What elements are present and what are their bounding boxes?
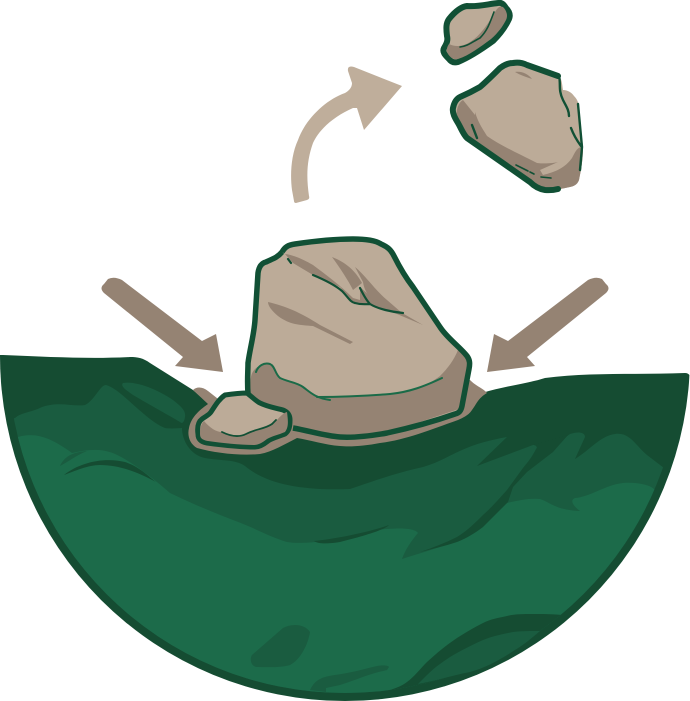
- rock outline: [248, 239, 470, 437]
- light soil layer: [18, 435, 654, 693]
- green crack along shadow edge: [256, 363, 442, 400]
- arrow: pressure from left: [102, 278, 223, 372]
- large rock crease marks: [515, 72, 532, 79]
- large rock shadow: [456, 100, 583, 190]
- top crease shadows: [285, 254, 423, 325]
- lens in bottom right arc: [418, 631, 540, 684]
- large rock thin edge: [472, 76, 582, 170]
- bottom right arc: [392, 614, 560, 690]
- small rock crack: [460, 12, 494, 47]
- rock body: [248, 239, 470, 437]
- pebble body: [198, 393, 290, 447]
- arrow: upward motion: [291, 66, 402, 203]
- patch of mid soil: [251, 625, 310, 667]
- crease shadow spike: [332, 257, 362, 290]
- dark crease at left of light layer: [64, 460, 156, 482]
- dark crease across mid layer: [420, 435, 568, 552]
- arrow: pressure from right: [487, 278, 608, 372]
- ground: half-circle soil layers: [0, 355, 690, 701]
- rock shadow base: [248, 350, 469, 437]
- small mid-tone crease at left: [60, 451, 87, 466]
- large rock in the ground: [248, 239, 470, 437]
- mid soil layer: [14, 385, 663, 559]
- small rock body: [443, 3, 510, 62]
- large flying rock: [453, 63, 583, 190]
- lens of mid soil by the hollow: [122, 383, 185, 423]
- green crack lines: [288, 259, 403, 313]
- large rock outline: [453, 63, 558, 190]
- small rock shadow: [447, 7, 507, 59]
- dark soil outline and top layer: [0, 355, 690, 701]
- pebble shadow: [200, 412, 288, 445]
- soil hollow around the rock and pebble: [188, 380, 487, 455]
- dark crease centre: [314, 525, 389, 543]
- second crease shadow spike: [355, 267, 402, 313]
- pebble crack: [222, 420, 276, 436]
- small pebble in the hollow: [198, 393, 290, 447]
- large rock lower cracks: [516, 165, 551, 178]
- large rock body: [453, 63, 583, 190]
- lower crease shadow: [268, 302, 353, 344]
- bottom patch of mid soil: [310, 665, 389, 692]
- small flying rock: [443, 3, 510, 62]
